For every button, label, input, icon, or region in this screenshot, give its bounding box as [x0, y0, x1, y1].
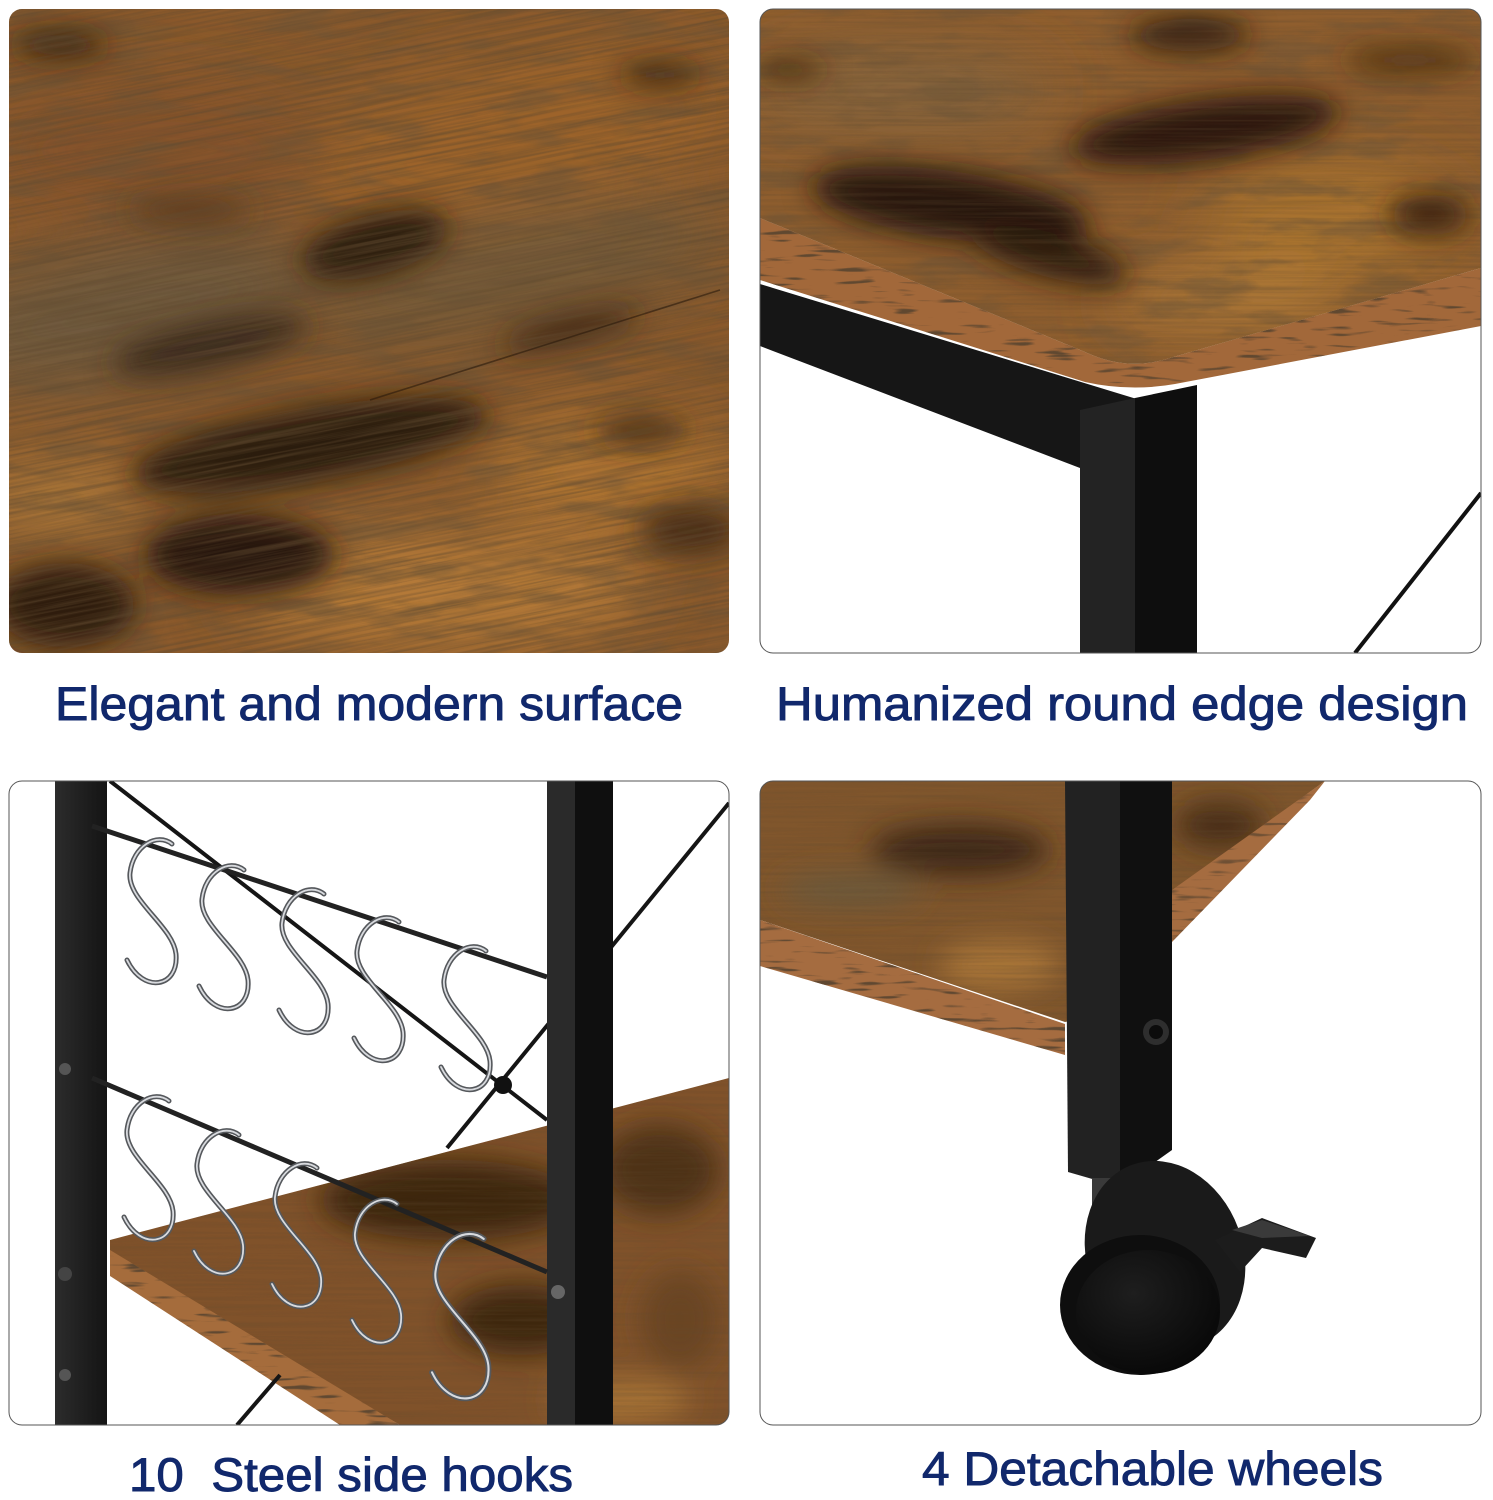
bottom row hooks — [124, 1097, 489, 1398]
panel border — [760, 9, 1481, 653]
cross wires — [110, 781, 729, 1425]
metal frame rail — [760, 284, 1140, 468]
panel: wood surface close-up — [0, 0, 972, 900]
caption: wheels: 4 Detachable wheels — [922, 1442, 1383, 1495]
wood tabletop — [750, 9, 1481, 369]
diagonal wire — [1355, 493, 1481, 653]
caption: hooks: 10 Steel side hooks — [129, 1448, 573, 1500]
left leg — [55, 781, 107, 1425]
caption: surface: Elegant and modern surface — [55, 677, 683, 730]
panel: detachable wheel — [760, 782, 1324, 1375]
top row hooks — [127, 840, 490, 1090]
panel border — [760, 781, 1481, 1425]
panel: steel side hooks — [9, 781, 740, 1430]
shelf top — [760, 781, 1330, 1031]
panel border — [9, 781, 729, 1425]
caption: round edge: Humanized round edge design — [776, 677, 1468, 730]
lower shelf — [100, 1070, 740, 1430]
panel: round edge design — [750, 9, 1481, 653]
table leg — [1080, 385, 1197, 653]
shelf front edge — [760, 915, 1070, 1060]
hook rods — [92, 826, 547, 1272]
wood edge — [760, 218, 1480, 388]
shelf front edge — [110, 1250, 399, 1424]
wire joint — [494, 1076, 512, 1094]
right leg — [547, 781, 613, 1425]
leg — [1065, 781, 1172, 1187]
shelf side edge — [1170, 781, 1330, 946]
caster wheel — [1059, 1138, 1316, 1375]
